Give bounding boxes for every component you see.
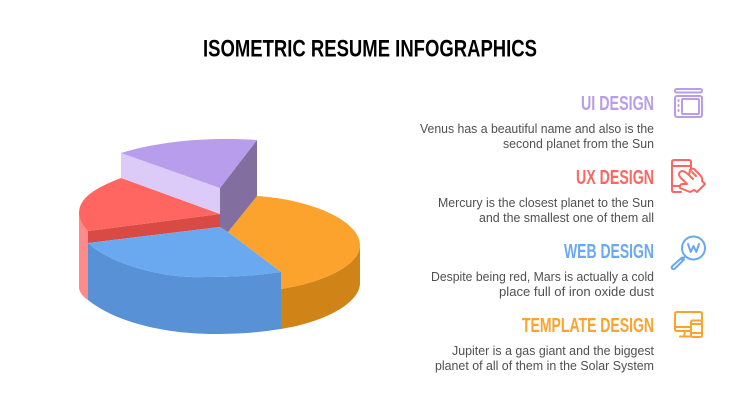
description: Venus has a beautiful name and also is the: [420, 122, 654, 136]
description: [431, 270, 655, 299]
chart: isometric exploded pie: [79, 139, 360, 334]
description: Mercury is the closest planet to the Sun: [438, 196, 654, 210]
description: place full of iron oxide dust: [499, 285, 655, 299]
description: [420, 122, 654, 151]
description: second planet from the Sun: [503, 137, 654, 151]
item: UX design: [438, 167, 654, 225]
heading: WEB DESIGN: [564, 241, 654, 263]
icon: drawing tablet: [675, 89, 702, 117]
icon: magnifier with W: [672, 236, 705, 269]
icon: hand on phone: [672, 160, 705, 192]
description: and the smallest one of them all: [479, 211, 654, 225]
item: Web design: [431, 241, 655, 299]
description: Jupiter is a gas giant and the biggest: [452, 344, 654, 358]
icon: responsive devices: [675, 312, 702, 337]
slice: orange (Template): [228, 196, 360, 329]
item: Template design: [435, 315, 654, 373]
heading: TEMPLATE DESIGN: [522, 315, 654, 337]
item: UI design: [420, 93, 654, 151]
slice: blue (Web): [88, 227, 281, 334]
slice: red (UX): [79, 178, 220, 300]
description: [438, 196, 654, 225]
description: [435, 344, 654, 373]
heading: UI DESIGN: [581, 93, 654, 115]
heading: UX DESIGN: [576, 167, 654, 189]
description: Despite being red, Mars is actually a cold: [431, 270, 654, 284]
title: ISOMETRIC RESUME INFOGRAPHICS: [203, 36, 537, 62]
slice: purple (UI): [121, 139, 257, 232]
description: planet of all of them in the Solar System: [435, 359, 654, 373]
